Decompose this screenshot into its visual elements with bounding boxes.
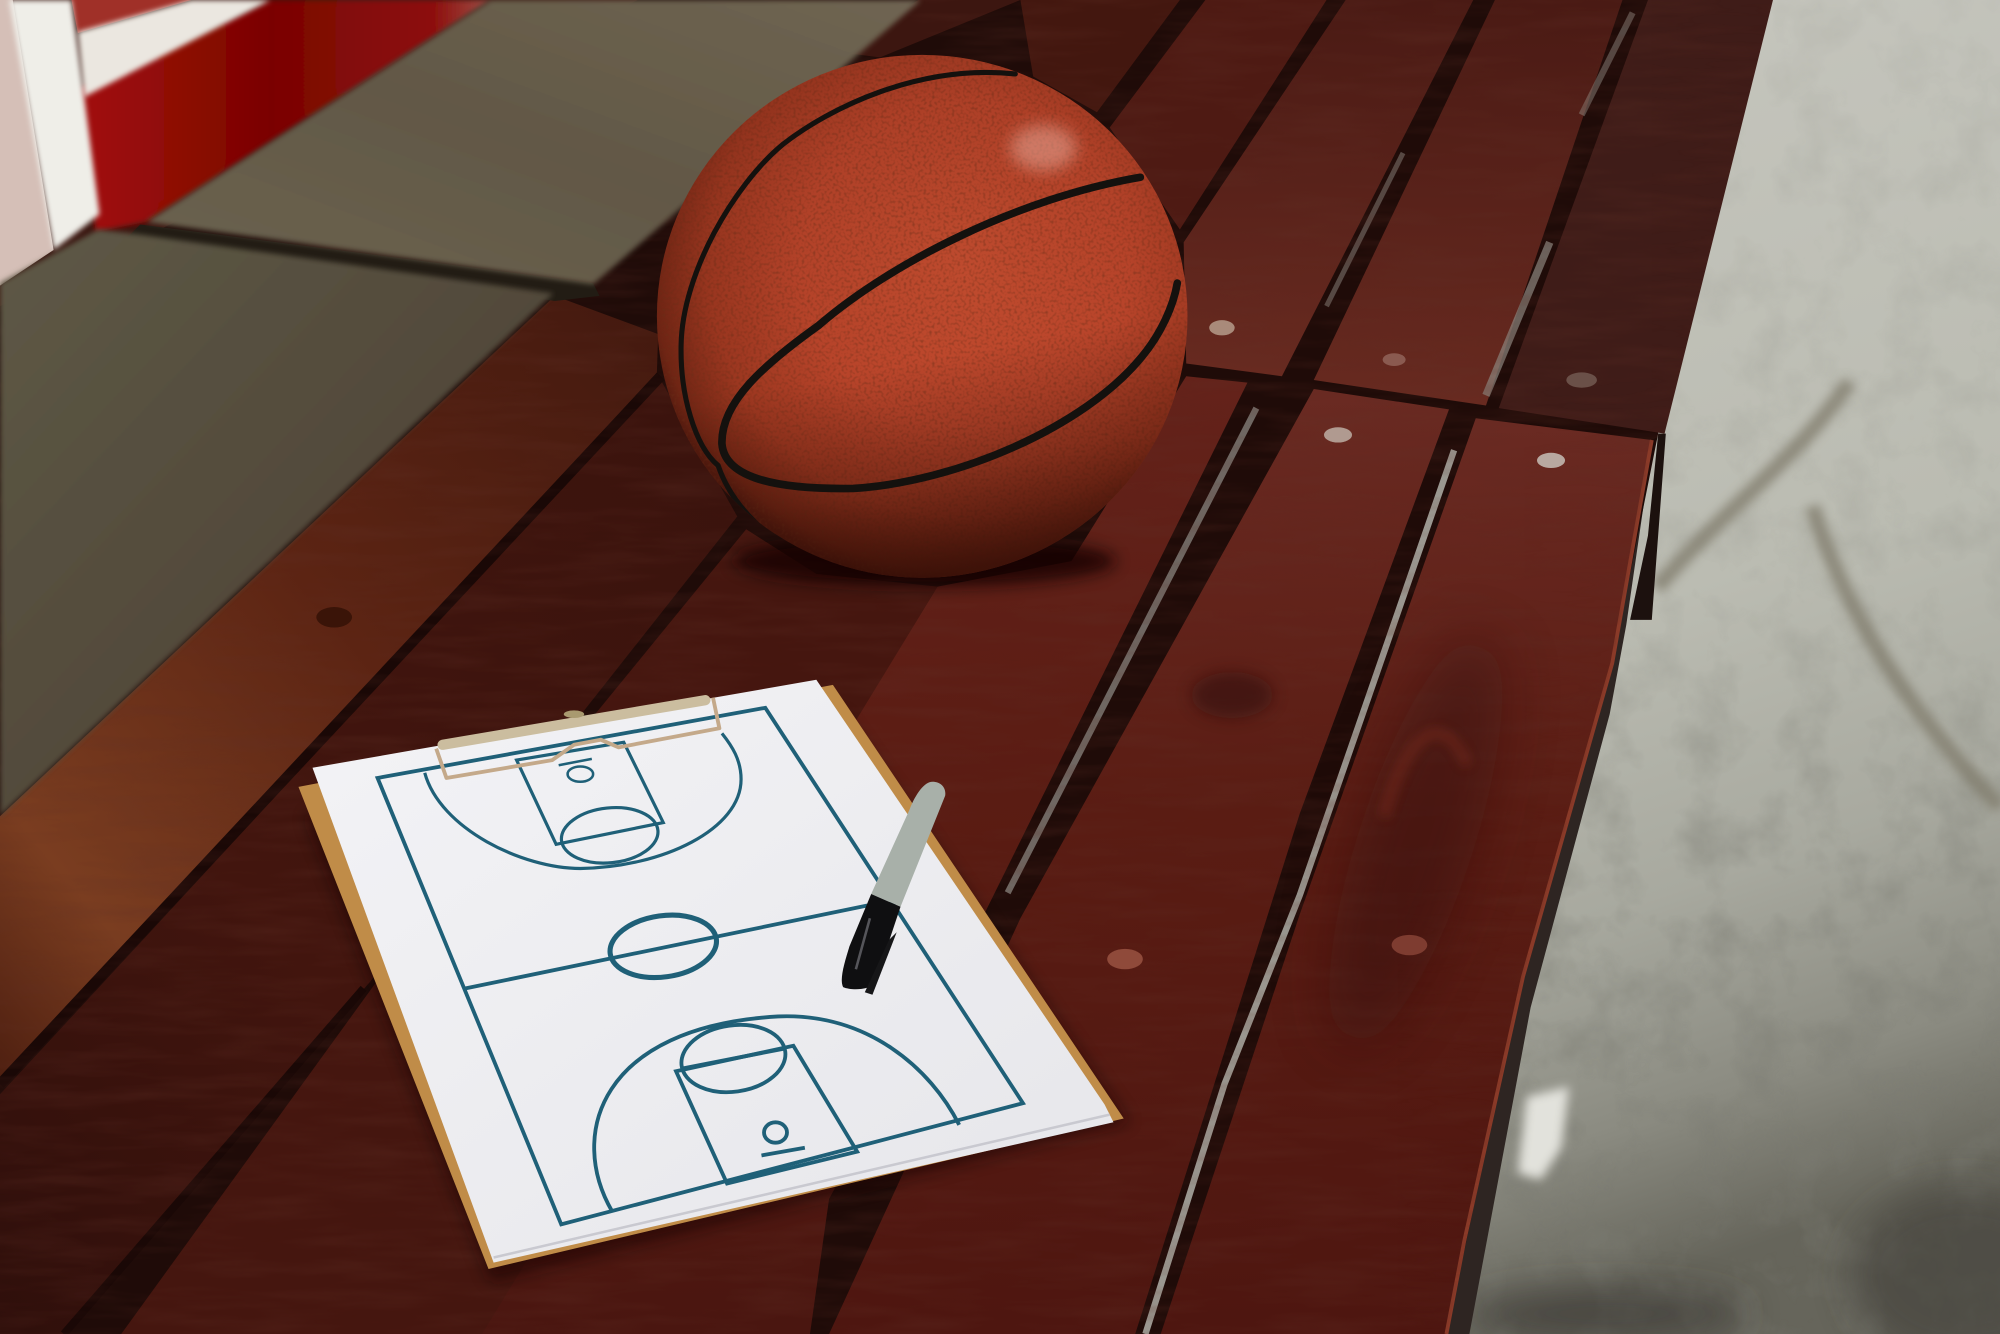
bracket under rear bench (1630, 434, 1666, 620)
basketball court diagram (378, 708, 1023, 1224)
paper sheet (312, 680, 1114, 1263)
lower stone step (0, 230, 554, 816)
white block under bench (1518, 1087, 1569, 1180)
clip wire loop (436, 698, 719, 778)
front plank: sixth (1161, 418, 1652, 1334)
front plank lit edge (1446, 440, 1652, 1334)
dark underside strip of bench (1441, 440, 1653, 1334)
ball shadow (733, 536, 1116, 587)
clip rod (443, 700, 705, 745)
front plank: far left upper (0, 296, 658, 1081)
basketball (657, 55, 1188, 578)
pale wall (0, 0, 54, 286)
wood knot shading on front plank (1328, 640, 1507, 1032)
front plank: fifth (829, 389, 1449, 1334)
concrete floor (1469, 0, 2000, 1334)
gap line between stone steps (128, 224, 599, 301)
marker cap clip (865, 932, 897, 995)
white post (9, 0, 99, 250)
ball highlight (1010, 125, 1077, 171)
marker body (871, 782, 945, 907)
upper stone step (147, 0, 921, 284)
front plank: second (0, 380, 737, 1334)
marker cap (842, 894, 901, 989)
clipboard clip (436, 698, 719, 778)
corner red sliver (71, 0, 191, 33)
rear plank metal gaps (1486, 242, 1550, 395)
marker pen (842, 782, 945, 995)
clipboard shadow (306, 714, 1129, 1282)
white rail (78, 0, 270, 97)
metal gaps between planks (0, 376, 1454, 1334)
rear bench planks (829, 0, 1773, 620)
red wall (77, 0, 491, 232)
ball dimple texture (675, 56, 1188, 525)
ball seams (681, 72, 1177, 564)
floor scuff marks (1657, 381, 2000, 807)
wood screws (316, 320, 1597, 969)
front plank: third (121, 529, 938, 1334)
paper sheets lower edge (494, 1115, 1110, 1257)
clipboard board (298, 685, 1124, 1269)
front plank: fourth (482, 376, 1247, 1334)
